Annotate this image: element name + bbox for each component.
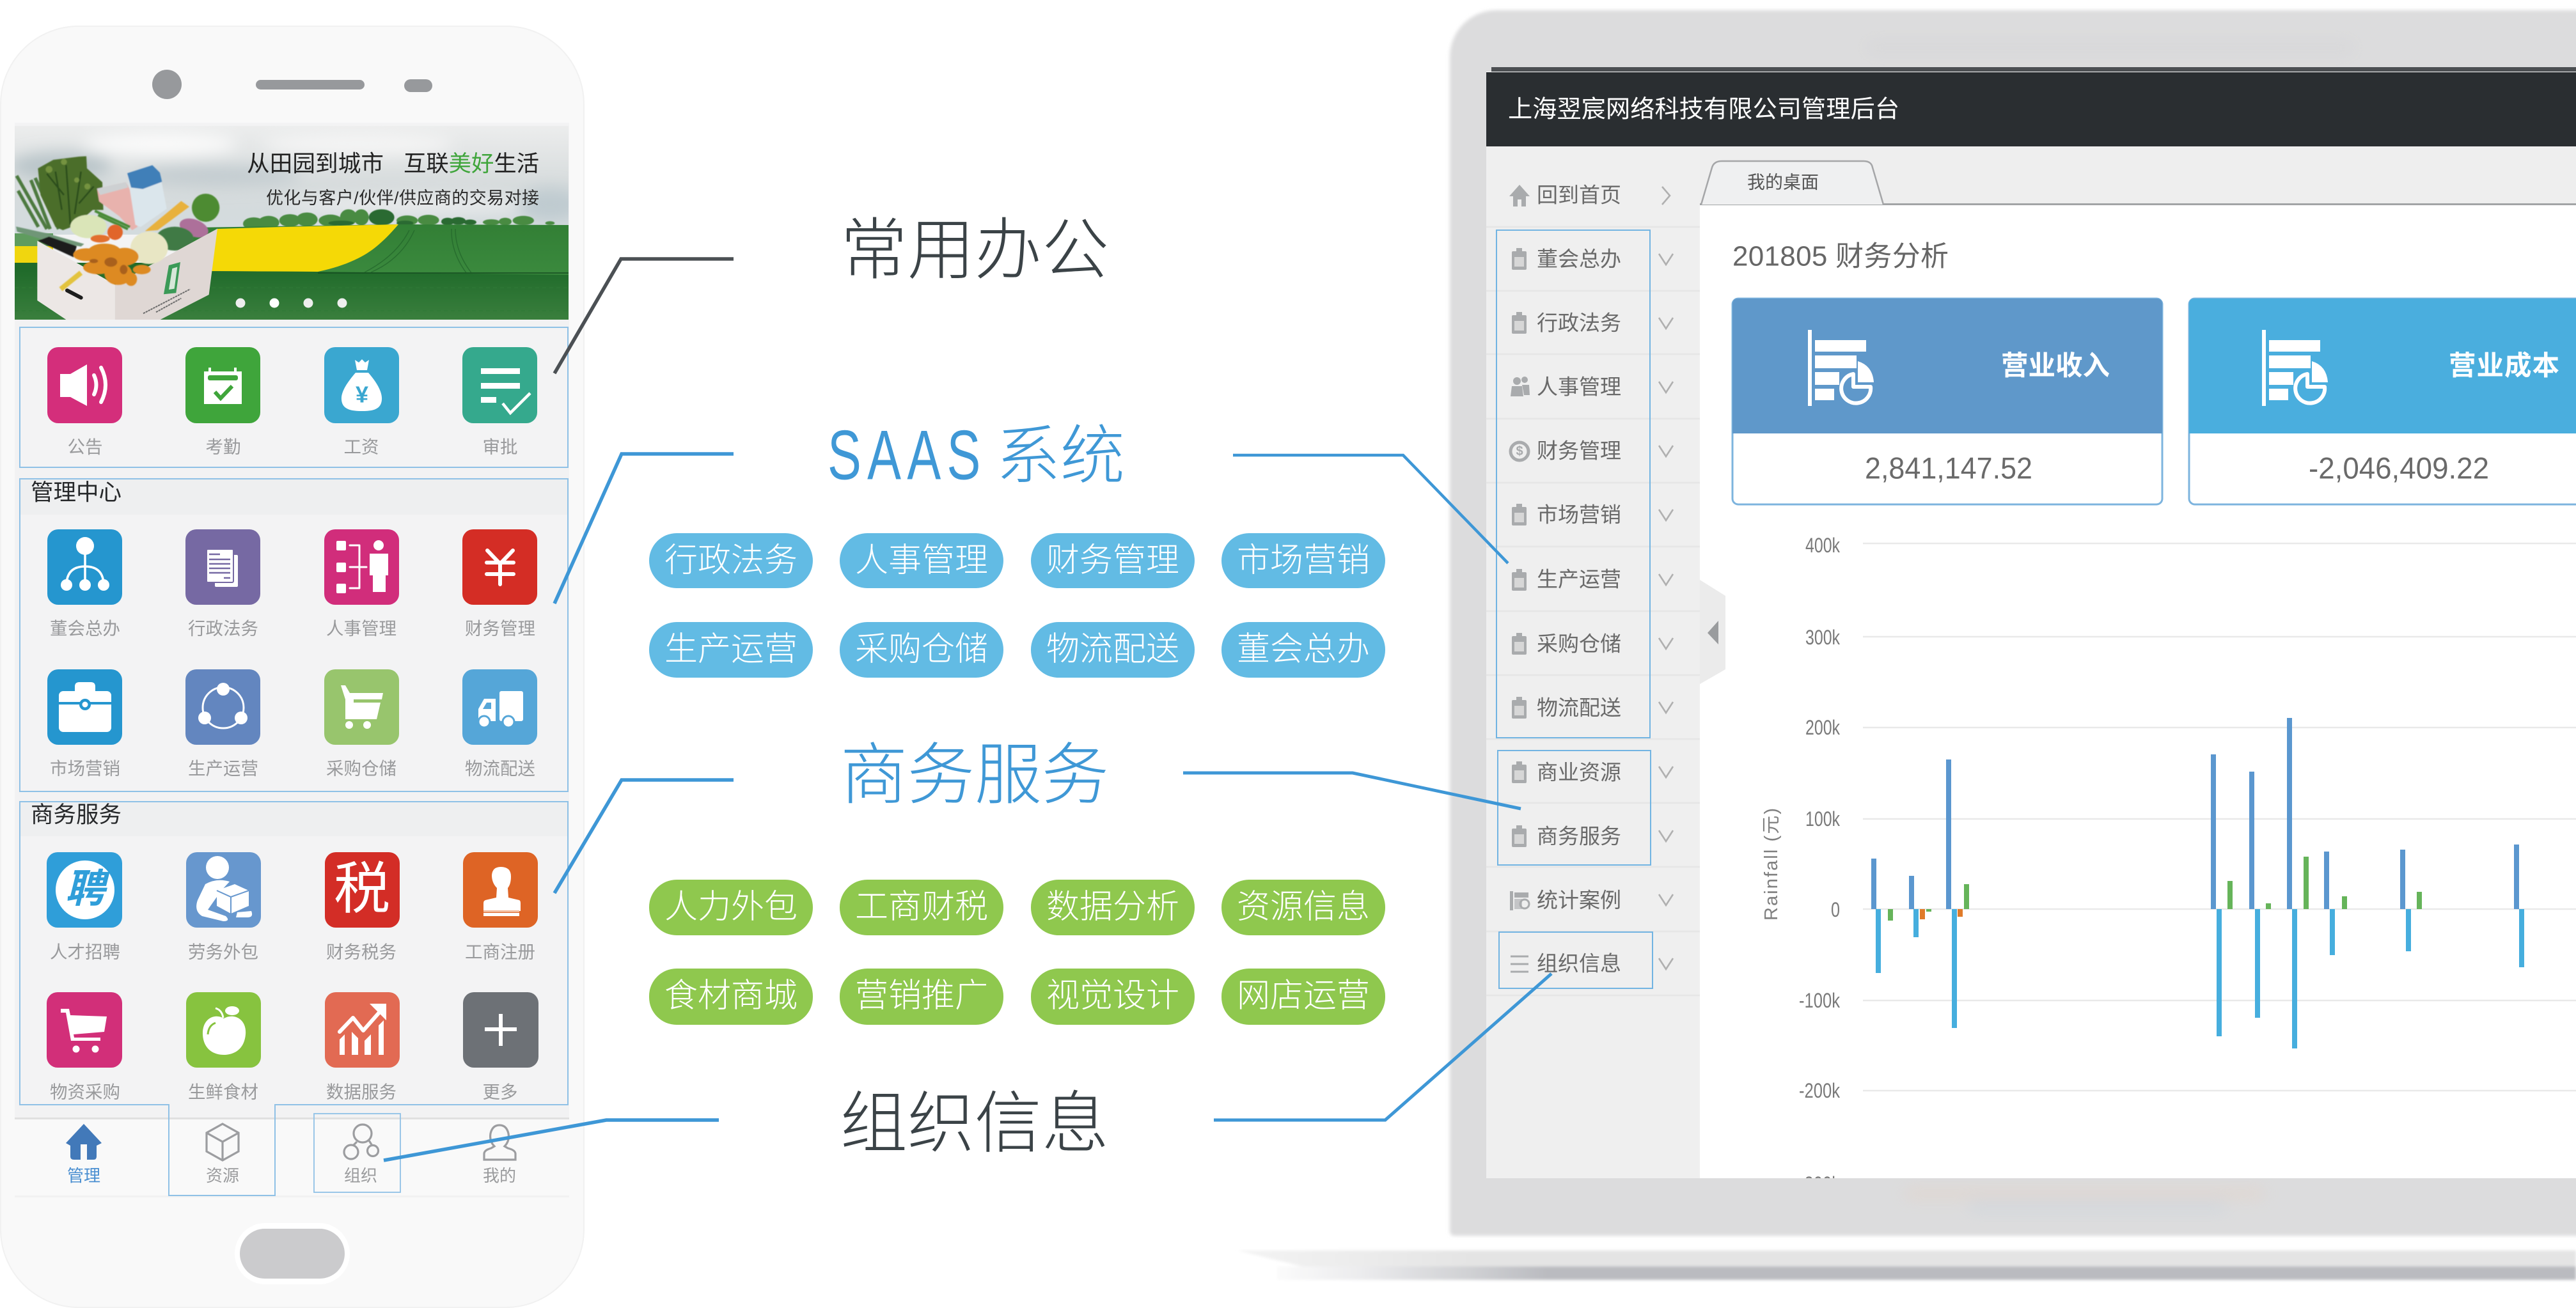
icon: recruiting: 聘 — [65, 867, 110, 912]
bar chart — [1761, 534, 2576, 1195]
hand hole — [67, 290, 81, 298]
menu: board office: 董会总办 — [1537, 247, 1621, 271]
top header bar — [1486, 72, 2576, 146]
tag — [649, 622, 813, 678]
tag: 物流配送 — [1046, 631, 1179, 668]
phone — [1, 26, 584, 1307]
tag: 市场营销 — [1237, 542, 1370, 579]
icon: logistics — [462, 669, 537, 745]
tag — [840, 533, 1003, 588]
menu: organization — [1511, 951, 1673, 976]
banner — [10, 126, 582, 320]
connector: common office to phone — [554, 259, 734, 373]
label: 工商注册 — [465, 942, 535, 962]
tag: 董会总办 — [1237, 631, 1370, 668]
y axis labels: 400k — [1805, 534, 1841, 557]
menu: home — [1509, 183, 1670, 207]
tag — [649, 533, 813, 588]
screen top shadow — [1491, 67, 2576, 73]
menu: admin legal — [1512, 311, 1673, 335]
banner slogan: 从田园到城市 — [247, 151, 384, 176]
section title band: 商务服务 — [31, 802, 122, 827]
vegetables — [16, 156, 219, 257]
icon: more — [463, 992, 538, 1068]
icon: data service — [325, 992, 400, 1068]
connector: organization tab to heading — [384, 1120, 719, 1160]
tag: 网店运营 — [1237, 977, 1370, 1015]
menu: marketing: 市场营销 — [1537, 502, 1621, 527]
label: 公告 — [68, 437, 102, 456]
y axis labels: 300k — [1805, 626, 1841, 649]
tab: resources — [206, 1124, 239, 1185]
y axis labels: -200k — [1799, 1079, 1841, 1102]
menu: marketing — [1512, 502, 1673, 527]
top header bar: 上海翌宸网络科技有限公司管理后台 — [1508, 96, 1899, 123]
label: 市场营销 — [50, 758, 120, 779]
icon: hr — [324, 529, 399, 605]
label: 生鲜食材 — [188, 1082, 258, 1102]
icon: attendance — [185, 347, 260, 423]
label: 人事管理 — [326, 619, 397, 638]
menu: production: 生产运营 — [1537, 568, 1621, 591]
tag: 工商财税 — [855, 889, 988, 926]
label: 财务管理 — [465, 619, 535, 638]
tag — [840, 880, 1003, 935]
card icon — [1808, 330, 1874, 406]
y axis labels: -300k — [1799, 1172, 1841, 1195]
connector: business services to admin menu — [1183, 773, 1521, 809]
laptop base shadow — [1237, 1250, 2576, 1280]
icon: board office — [47, 529, 122, 605]
tag — [1031, 880, 1195, 935]
tag: 采购仓储 — [855, 631, 988, 668]
icon: registration — [463, 852, 538, 928]
box body — [37, 241, 115, 320]
icon: finance — [462, 529, 537, 605]
admin screen — [1486, 72, 2576, 1195]
tag — [1221, 533, 1385, 588]
camera — [152, 70, 182, 99]
sidebar collapse handle — [1700, 580, 1725, 684]
menu: production — [1512, 568, 1673, 591]
tag — [649, 880, 813, 935]
banner slogan: 优化与客户/伙伴/供应商的交易对接 — [266, 189, 539, 208]
heading: organization info: 组织信息 — [840, 1087, 1109, 1161]
label: 采购仓储 — [326, 758, 397, 779]
tag: 人力外包 — [664, 889, 797, 926]
bars: income — [1871, 718, 2519, 909]
label: 财务税务 — [326, 942, 397, 962]
card: cost: 营业成本 — [2449, 352, 2559, 381]
fields — [192, 224, 569, 276]
menu: organization: 组织信息 — [1537, 951, 1621, 976]
sidebar — [1486, 146, 1700, 1178]
tag: 人事管理 — [855, 542, 988, 579]
label: 劳务外包 — [188, 942, 258, 962]
icon: recruiting — [47, 852, 122, 928]
label: 行政法务 — [188, 619, 258, 638]
label: 工资 — [344, 437, 379, 456]
page heading: 201805 财务分析 — [1732, 240, 1949, 272]
tag: 资源信息 — [1237, 889, 1370, 926]
tag — [1031, 622, 1195, 678]
heading: SAAS system: SAAS — [828, 416, 987, 494]
menu: business service — [1512, 825, 1673, 848]
tag: 财务管理 — [1046, 542, 1179, 579]
menu: purchasing — [1512, 632, 1673, 656]
label: 董会总办 — [50, 619, 120, 638]
speaker — [256, 80, 365, 90]
highlight frame: section outline — [20, 802, 568, 1195]
produce box — [16, 156, 219, 320]
menu: finance: 财务管理 — [1537, 439, 1621, 463]
card: revenue: 营业收入 — [2001, 352, 2110, 381]
bezel reflection — [1867, 42, 2353, 1211]
y axis labels — [1799, 534, 1841, 1195]
icon: salary — [324, 347, 399, 423]
tag: 视觉设计 — [1046, 977, 1179, 1015]
items over box — [61, 224, 168, 289]
menu: logistics — [1512, 696, 1673, 720]
menu: hr: 人事管理 — [1537, 375, 1621, 399]
tab: resources: 资源 — [206, 1166, 239, 1185]
content background — [1486, 72, 2576, 1178]
connector: organization info to admin menu — [1214, 974, 1551, 1120]
section: common office — [20, 327, 568, 467]
icon: approval — [462, 347, 537, 423]
tag — [840, 969, 1003, 1025]
tab: organization: 组织 — [344, 1166, 377, 1185]
tree line — [243, 209, 554, 230]
icon: admin legal — [185, 529, 260, 605]
y axis labels: 100k — [1805, 807, 1841, 830]
tag: 生产运营 — [664, 631, 797, 668]
section title band — [20, 802, 567, 836]
tag group: SAAS modules — [649, 533, 1385, 678]
menu: business resources: 商业资源 — [1537, 761, 1621, 784]
heading: SAAS system — [828, 416, 1125, 494]
label: 物资采购 — [50, 1082, 120, 1102]
section: business services — [20, 802, 568, 1195]
icon: tax — [325, 852, 400, 928]
menu: statistics: 统计案例 — [1537, 889, 1621, 912]
label: 物流配送 — [465, 758, 535, 779]
tab: mine: 我的 — [483, 1166, 516, 1185]
field tracks — [15, 229, 569, 311]
grid lines — [1863, 543, 2576, 1091]
y axis labels: 0 — [1831, 898, 1840, 921]
connector: management center to SAAS — [554, 454, 734, 603]
label: 审批 — [482, 437, 518, 456]
menu: logistics: 物流配送 — [1537, 696, 1621, 720]
icon: marketing — [47, 669, 122, 745]
phone body — [1, 26, 584, 1307]
clouds — [10, 132, 582, 221]
icon: salary: ¥ — [356, 381, 368, 408]
tab: mine — [483, 1125, 516, 1185]
tab: manage: 管理 — [67, 1166, 100, 1185]
bottom tab bar — [15, 1117, 569, 1197]
icon: production — [185, 669, 260, 745]
menu: business service: 商务服务 — [1537, 825, 1621, 848]
highlight frame: organization tab — [314, 1114, 400, 1192]
tag — [1221, 969, 1385, 1025]
laptop — [1237, 10, 2576, 1280]
y axis labels: -100k — [1799, 989, 1841, 1012]
tag — [649, 969, 813, 1025]
card: cost: -2,046,409.22 — [2309, 451, 2489, 485]
banner slogan: 互联美好生活 — [404, 151, 539, 176]
tab strip: 我的桌面 — [1747, 173, 1819, 192]
sky — [15, 126, 569, 235]
menu: business resources — [1512, 761, 1673, 784]
menu: finance: $ — [1516, 444, 1523, 458]
tag — [1031, 533, 1195, 588]
tag — [1031, 969, 1195, 1025]
menu: home: 回到首页 — [1537, 183, 1621, 207]
y axis labels: 200k — [1805, 716, 1841, 739]
tag: 营销推广 — [855, 977, 988, 1015]
banner slogan — [247, 151, 539, 208]
banner dots — [235, 298, 347, 308]
label: 人才招聘 — [50, 942, 120, 962]
tag — [1221, 622, 1385, 678]
card: revenue: 2,841,147.52 — [1865, 451, 2032, 485]
heading: SAAS system: 系统 — [996, 421, 1125, 492]
icon: purchasing — [324, 669, 399, 745]
card: revenue — [1732, 299, 2162, 504]
far fields left — [15, 233, 53, 263]
laptop bezel — [1450, 10, 2576, 1236]
heading: business services: 商务服务 — [840, 738, 1109, 813]
connector: SAAS to admin menu — [1233, 455, 1508, 563]
tag: 食材商城 — [664, 977, 797, 1015]
card: cost — [2189, 299, 2576, 504]
menu: statistics — [1510, 889, 1673, 912]
icon: fresh food — [186, 992, 261, 1068]
menu: finance — [1511, 439, 1673, 463]
icon: tax: 税 — [334, 857, 390, 921]
phone screen background — [15, 123, 569, 559]
sidebar highlight boxes — [1496, 230, 1653, 988]
heading: common office: 常用办公 — [840, 214, 1109, 288]
bars: profit — [1888, 857, 2422, 921]
y axis title: Rainfall (元) — [1761, 808, 1782, 921]
section title band — [20, 479, 567, 515]
label: 更多 — [482, 1082, 518, 1102]
tab: organization — [344, 1125, 379, 1185]
label: 生产运营 — [188, 758, 258, 779]
home button — [235, 1223, 350, 1284]
menu: purchasing: 采购仓储 — [1537, 632, 1621, 656]
menu: hr — [1511, 375, 1673, 399]
tag: 数据分析 — [1046, 889, 1179, 926]
bars: cost — [1876, 909, 2524, 1048]
menu: board office — [1512, 247, 1673, 271]
bars: expense — [1920, 909, 1963, 919]
icon: procurement — [47, 992, 122, 1068]
section title band: 管理中心 — [31, 479, 122, 505]
menu: admin legal: 行政法务 — [1537, 311, 1621, 335]
card icon — [2262, 330, 2328, 406]
label: 考勤 — [206, 437, 240, 456]
tag group: business services — [649, 880, 1385, 1025]
tab strip — [1700, 146, 2576, 205]
tag: 行政法务 — [664, 542, 797, 579]
label: 数据服务 — [326, 1082, 397, 1102]
connector: business section to heading — [554, 780, 734, 893]
tag — [840, 622, 1003, 678]
section: management center — [20, 479, 568, 791]
icon: announcement — [47, 347, 122, 423]
sensor — [404, 79, 432, 92]
tag — [1221, 880, 1385, 935]
icon: outsourcing — [186, 852, 261, 928]
tab: manage — [66, 1124, 102, 1185]
box label — [164, 262, 180, 294]
